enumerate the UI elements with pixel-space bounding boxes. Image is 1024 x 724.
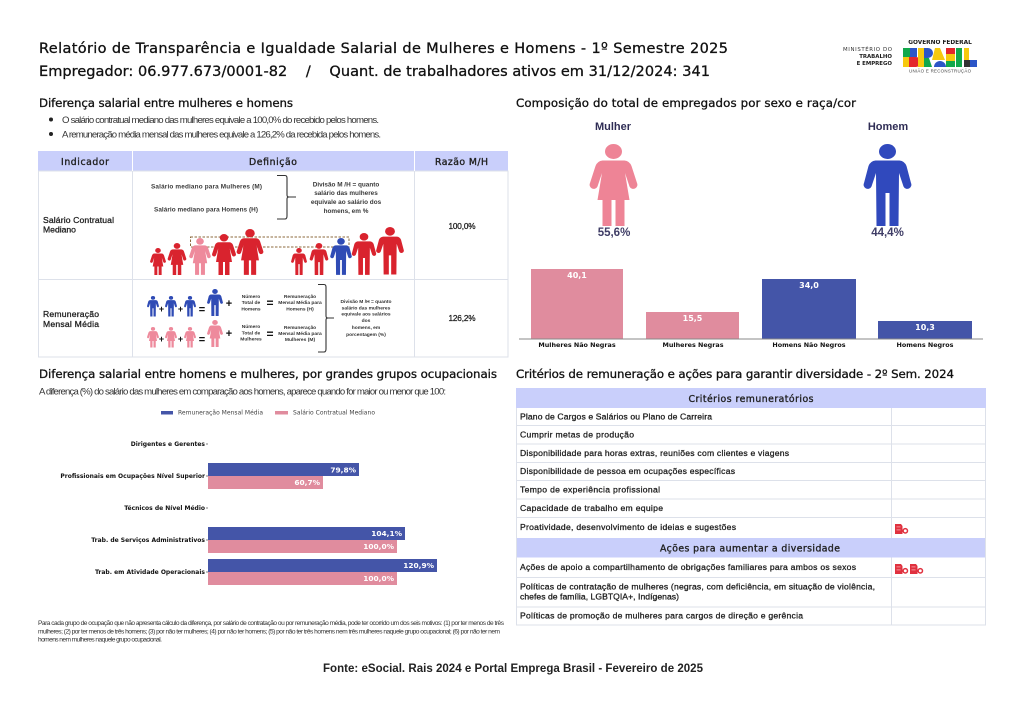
footnote xyxy=(38,620,505,644)
title xyxy=(39,41,728,80)
horizontal bar chart: occupational groups: 120,9% xyxy=(403,561,435,570)
bar chart: sex and race: 34,0 xyxy=(799,281,819,290)
criteria rows: Plano de Cargos e Salários ou Plano de Carreira xyxy=(520,412,712,422)
horizontal bar chart: occupational groups: 79,8% xyxy=(330,466,357,474)
formula: men average: Número xyxy=(242,294,260,300)
horizontal bar chart: occupational groups: 60,7% xyxy=(294,478,321,487)
criteria rows: Cumprir metas de produção xyxy=(520,430,634,440)
horizontal bar chart: occupational groups xyxy=(60,441,437,585)
bar chart: sex and race: Mulheres Negras xyxy=(662,341,724,349)
definition: median text and bracket: equivale ao salário dos xyxy=(311,199,382,206)
panel: indicator table xyxy=(38,151,508,357)
definition: median text and bracket: salário das mulheres xyxy=(314,190,378,197)
ratio: 126,2%: 126,2% xyxy=(448,314,476,323)
horizontal bar chart: occupational groups: 104,1% xyxy=(371,529,403,538)
table header xyxy=(61,157,488,168)
row label: Remuneração Mensal Média: Remuneração xyxy=(43,309,99,319)
horizontal bar chart: occupational groups: Trab. em Atividade Operacionais xyxy=(95,569,205,576)
formula: men average: Homens xyxy=(241,306,261,312)
table header: Definição xyxy=(249,157,297,168)
bracket and division text: salário das mulheres xyxy=(342,306,391,312)
definition: median text and bracket xyxy=(151,176,382,219)
formula: men average: Remuneração xyxy=(284,294,316,300)
pictogram: women and men ordered by salary xyxy=(150,227,404,275)
title: Relatório de Transparência e Igualdade Salarial de Mulheres e Homens - 1º Semestre 2025 xyxy=(39,41,728,57)
definition: median text and bracket: Divisão M /H = quanto xyxy=(313,182,379,188)
table header: Indicador xyxy=(61,157,109,168)
horizontal bar chart: occupational groups: 100,0% xyxy=(363,574,395,583)
logo: Ministério do Trabalho e Emprego: TRABALHO xyxy=(859,54,892,60)
criteria rows: Disponibilidade de pessoa em ocupações específicas xyxy=(520,466,735,476)
bar chart: sex and race: Homens Não Negros xyxy=(772,341,846,349)
formula: men average: Mensal Média para xyxy=(278,300,322,306)
section header: Critérios remuneratórios: Critérios remuneratórios xyxy=(688,394,814,405)
bullet text block: A remuneração média mensal das mulheres equivale a 126,2% da recebida pelos homens. xyxy=(62,130,381,140)
formula: men average: Homens (H) xyxy=(286,306,314,312)
criteria rows xyxy=(520,412,789,532)
pictogram: Homem 44,4%: 44,4% xyxy=(871,227,904,239)
row label: Remuneração Mensal Média: Mensal Média xyxy=(43,319,99,329)
formula: men average: + xyxy=(226,298,232,310)
bullet text block xyxy=(49,115,381,140)
formula: women average: Remuneração xyxy=(284,325,316,331)
row label: Salário Contratual Mediano: Salário Contratual xyxy=(43,215,114,225)
bracket and division text xyxy=(318,284,391,352)
criteria rows: Capacidade de trabalho em equipe xyxy=(520,503,663,513)
bar chart: sex and race: 40,1 xyxy=(567,271,587,280)
bracket and division text: porcentagem (%) xyxy=(346,332,386,338)
pictogram: Homem 44,4% xyxy=(864,121,911,239)
horizontal bar chart: occupational groups: 100,0% xyxy=(363,542,395,551)
heading: Composição: Composição do total de empregados por sexo e raça/cor xyxy=(516,96,856,110)
logo: Governo Federal Brasil: UNIÃO E RECONSTRUÇÃO xyxy=(909,68,972,74)
formula: men average: + xyxy=(178,304,183,314)
table header: Razão M/H xyxy=(435,157,488,168)
action rows: Políticas de promoção de mulheres para cargos de direção e gerência xyxy=(520,610,803,620)
footnote: Para cada grupo de ocupação que não apresenta cálculo da diferença, por salário de contratação ou por remuneração média, pode ter ocorrido um dos seis motivos: (1) por ter menos de três xyxy=(38,620,505,627)
horizontal bar chart: occupational groups: Técnicos de Nível Médio xyxy=(124,505,205,512)
subtitle text: A diferença (%) do salário das mulheres em comparação aos homens, aparece quando for maior ou menor que 100: xyxy=(39,386,446,398)
bracket and division text: homens, em xyxy=(352,325,381,331)
bar chart: sex and race: Mulheres Não Negras xyxy=(538,341,616,349)
bar chart: sex and race: Homens Negros xyxy=(897,341,954,349)
row label: Remuneração Mensal Média xyxy=(43,309,99,329)
heading: Diferença salarial entre mulheres e homens: Diferença salarial entre mulheres e homens xyxy=(39,96,293,110)
source line: Fonte: eSocial. Rais 2024 e Portal Emprega Brasil - Fevereiro de 2025 xyxy=(323,663,704,675)
definition: median text and bracket: homens, em % xyxy=(324,208,369,215)
footnote: homens nem mulheres naquele grupo ocupacional. xyxy=(38,636,162,644)
action rows xyxy=(520,562,875,620)
formula: women average: = xyxy=(266,327,274,341)
formula: women average: = xyxy=(199,334,205,346)
formula: men average: = xyxy=(266,296,274,310)
logo: Governo Federal Brasil: GOVERNO FEDERAL xyxy=(908,40,972,46)
logo: Ministério do Trabalho e Emprego: MINISTÉRIO DO xyxy=(843,45,892,53)
formula: women average xyxy=(147,320,322,348)
icon: red marker, proatividade xyxy=(895,524,908,534)
formula: women average: + xyxy=(159,334,164,344)
section header: Ações para aumentar a diversidade: Ações para aumentar a diversidade xyxy=(660,544,840,554)
legend xyxy=(161,410,375,416)
formula: men average: = xyxy=(199,304,205,316)
formula: women average: Número xyxy=(242,324,260,330)
logo: Governo Federal Brasil xyxy=(903,40,977,74)
icons: two red markers, ações de apoio xyxy=(895,564,922,574)
formula: women average: Mulheres xyxy=(240,336,262,342)
bracket and division text: dos xyxy=(362,318,371,324)
panel: criteria table xyxy=(516,388,986,625)
legend: Remuneração Mensal Média xyxy=(178,410,263,416)
criteria rows: Disponibilidade para horas extras, reuniões com clientes e viagens xyxy=(520,448,789,458)
logo: Ministério do Trabalho e Emprego xyxy=(843,45,892,67)
action rows: Ações de apoio a compartilhamento de obrigações familiares para ambos os sexos xyxy=(520,562,856,572)
row label: Salário Contratual Mediano xyxy=(43,215,114,234)
formula: women average: Mensal Média para xyxy=(278,331,322,337)
definition: median text and bracket: Salário mediano para Mulheres (M) xyxy=(151,184,262,190)
criteria rows: Proatividade, desenvolvimento de ideias e sugestões xyxy=(520,522,736,532)
formula: women average: + xyxy=(178,334,183,344)
footnote: mulheres; (2) por ter menos de três homens; (3) por não ter mulheres; (4) por não ter homens; (5) por não ter três homens nem três mulheres naquele grupo ocupacional; (6) por não ter nem xyxy=(38,628,501,636)
formula: men average: Total de xyxy=(242,300,260,306)
ratio: 100,0%: 100,0% xyxy=(448,222,476,231)
bar chart: sex and race xyxy=(519,269,983,349)
heading: Critérios de remuneração: Critérios de remuneração e ações para garantir diversidade - 2º Sem. 2024 xyxy=(516,367,954,381)
bullet text block: O salário contratual mediano das mulheres equivale a 100,0% do recebido pelos homens. xyxy=(62,115,379,126)
pictogram: Mulher 55,6% xyxy=(590,121,637,239)
pictogram: Mulher 55,6%: 55,6% xyxy=(598,227,630,239)
title: Empregador: 06.977.673/0001-82 / Quant. de trabalhadores ativos em 31/12/2024: 341 xyxy=(39,64,710,80)
formula: men average xyxy=(147,289,322,316)
logo: Ministério do Trabalho e Emprego: E EMPREGO xyxy=(857,61,892,67)
row label: Salário Contratual Mediano: Mediano xyxy=(43,224,76,234)
definition: median text and bracket: Salário mediano para Homens (H) xyxy=(154,206,258,214)
bracket and division text: equivale aos salários xyxy=(341,312,391,318)
horizontal bar chart: occupational groups: Trab. de Serviços Administrativos xyxy=(91,537,205,544)
formula: women average: + xyxy=(226,328,232,340)
formula: women average: Total de xyxy=(242,330,260,336)
legend: Salário Contratual Mediano xyxy=(293,410,375,416)
formula: men average: + xyxy=(159,304,164,314)
horizontal bar chart: occupational groups: Profissionais em Ocupações Nível Superior xyxy=(60,473,205,480)
bar chart: sex and race: 10,3 xyxy=(915,323,935,332)
bracket and division text: Divisão M /H = quanto xyxy=(341,299,391,305)
action rows: chefes de família, LGBTQIA+, Indígenas) xyxy=(520,592,679,602)
pictogram: Homem 44,4%: Homem xyxy=(868,121,908,133)
formula: women average: Mulheres (M) xyxy=(285,337,315,343)
pictogram: Mulher 55,6%: Mulher xyxy=(595,121,632,133)
bar chart: sex and race: 15,5 xyxy=(683,314,703,323)
criteria rows: Tempo de experiência profissional xyxy=(520,484,660,494)
horizontal bar chart: occupational groups: Dirigentes e Gerentes xyxy=(131,441,205,448)
action rows: Políticas de contratação de mulheres (negras, com deficiência, em situação de violência, xyxy=(520,582,875,592)
heading: por grandes grupos ocupacionais: Diferença salarial entre homens e mulheres, por grandes grupos ocupacionais xyxy=(39,367,497,381)
